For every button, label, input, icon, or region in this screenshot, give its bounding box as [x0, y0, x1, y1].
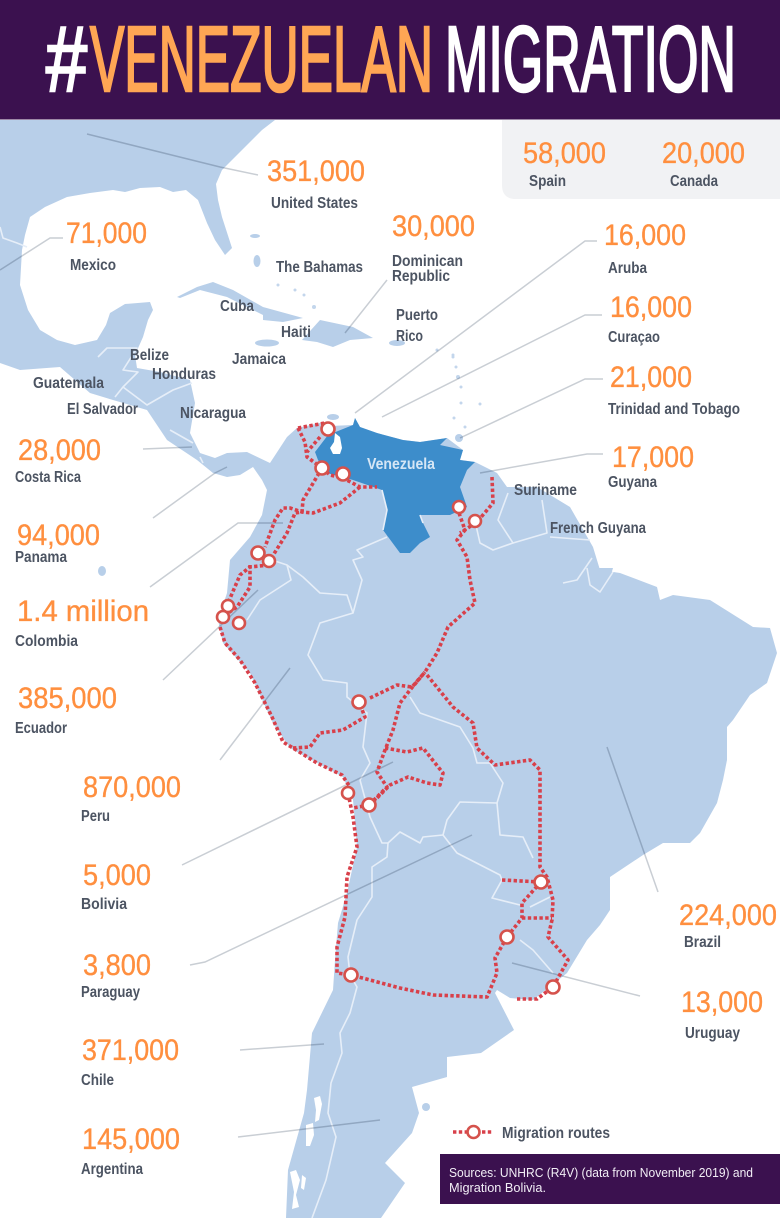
Cuba [177, 282, 303, 322]
callout: Colombia [15, 595, 149, 650]
callout: Costa Rica [15, 434, 101, 486]
callout: Peru [81, 771, 181, 825]
map: place names: Guatemala [33, 375, 104, 392]
callout: United States: United States [271, 195, 358, 212]
map: place names: Cuba [220, 298, 254, 315]
sources box [440, 1154, 780, 1204]
header banner [0, 0, 780, 120]
callout: Ecuador: Ecuador [15, 720, 67, 737]
callout: Aruba [604, 219, 686, 277]
map: place names: Belize [130, 347, 169, 364]
callout: Peru: Peru [81, 808, 110, 825]
callout: Chile: 371,000 [82, 1034, 179, 1067]
map: place names: Suriname [514, 482, 577, 499]
callout: United States: 351,000 [267, 155, 365, 188]
callout: Aruba: Aruba [608, 260, 647, 277]
legend: migration routes [453, 1125, 610, 1142]
callout: Spain: Spain [529, 173, 566, 190]
callout: Canada [662, 137, 745, 190]
callout: Canada: 20,000 [662, 137, 745, 170]
callout: Mexico: 71,000 [66, 217, 147, 250]
callout: Peru: 870,000 [83, 771, 181, 804]
map: place names: French Guyana [550, 520, 646, 537]
callout: Bolivia: 5,000 [83, 859, 151, 892]
leader lines [0, 134, 658, 1137]
callout: Aruba: 16,000 [604, 219, 686, 252]
map: place names: Nicaragua [180, 405, 246, 422]
map: place names: Rico [396, 328, 423, 345]
callout: Curaçao: Curaçao [608, 329, 660, 346]
small Caribbean islands [276, 284, 482, 428]
callout: Argentina: Argentina [81, 1161, 143, 1178]
sources box: Sources: UNHRC (R4V) (data from November 2019) and [449, 1165, 753, 1180]
migration routes [220, 423, 568, 999]
callout: Uruguay: 13,000 [681, 986, 763, 1019]
callout: Costa Rica: Costa Rica [15, 469, 81, 486]
map: place names [33, 259, 646, 537]
callout: Guyana [608, 441, 694, 491]
callout: Trinidad and Tobago [608, 361, 740, 418]
map: country borders [0, 227, 613, 1218]
callout: Trinidad and Tobago: Trinidad and Tobago [608, 401, 740, 418]
map: place names: Jamaica [232, 351, 286, 368]
callout: Dominican Republic: Republic [392, 268, 450, 285]
map: place names: Venezuela [367, 456, 435, 473]
legend: migration routes: Migration routes [502, 1125, 610, 1142]
callout: Chile: Chile [81, 1072, 114, 1089]
callout: Dominican Republic [392, 210, 475, 285]
callout: Mexico [66, 217, 147, 274]
callout: Curaçao [608, 291, 692, 346]
callout: Bolivia: Bolivia [81, 896, 127, 913]
callout: Costa Rica: 28,000 [18, 434, 101, 467]
callout: Curaçao: 16,000 [610, 291, 692, 324]
callout: Ecuador [15, 682, 117, 737]
map: place names: Honduras [152, 366, 216, 383]
callout: Ecuador: 385,000 [18, 682, 117, 715]
map: place names: The Bahamas [276, 259, 363, 276]
callout: Argentina [81, 1123, 180, 1178]
panel: Spain and Canada inset background [502, 120, 780, 199]
callout: Colombia: 1.4 million [17, 595, 149, 628]
Hispaniola [302, 320, 373, 347]
callout: Spain: 58,000 [523, 137, 606, 170]
callout: Dominican Republic: Dominican [392, 253, 463, 270]
callout: Guyana: 17,000 [612, 441, 694, 474]
callout: Dominican Republic: 30,000 [392, 210, 475, 243]
callout: Brazil [679, 899, 777, 951]
callout: Panama: 94,000 [17, 519, 100, 552]
callout: Guyana: Guyana [608, 474, 657, 491]
callout: Trinidad and Tobago: 21,000 [610, 361, 692, 394]
callout: Panama: Panama [15, 549, 67, 566]
map: place names: Haiti [281, 324, 311, 341]
callout: Chile [81, 1034, 179, 1089]
callout: Colombia: Colombia [15, 633, 78, 650]
callout: Paraguay: Paraguay [81, 984, 140, 1001]
callout: Panama [15, 519, 100, 566]
callout: Paraguay: 3,800 [83, 949, 151, 982]
callout: Uruguay: Uruguay [685, 1025, 740, 1042]
Patagonian fjords [290, 1096, 322, 1209]
sources box: Migration Bolivia. [449, 1180, 546, 1195]
callout: Uruguay [681, 986, 763, 1042]
route stop circles [217, 422, 560, 994]
callout: United States [267, 155, 365, 212]
map: place names: Puerto [396, 307, 438, 324]
callout: Argentina: 145,000 [82, 1123, 180, 1156]
callout: Spain [523, 137, 606, 190]
callout: Mexico: Mexico [70, 257, 116, 274]
title: VENEZUELAN [90, 7, 433, 111]
map: place names: El Salvador [67, 401, 138, 418]
title: # [46, 7, 87, 111]
callout: Brazil: Brazil [684, 934, 721, 951]
Lake Maracaibo [330, 433, 342, 454]
callout: Paraguay [81, 949, 151, 1001]
callout: Canada: Canada [670, 173, 718, 190]
Venezuela [315, 418, 475, 553]
callout: Bolivia [81, 859, 151, 913]
